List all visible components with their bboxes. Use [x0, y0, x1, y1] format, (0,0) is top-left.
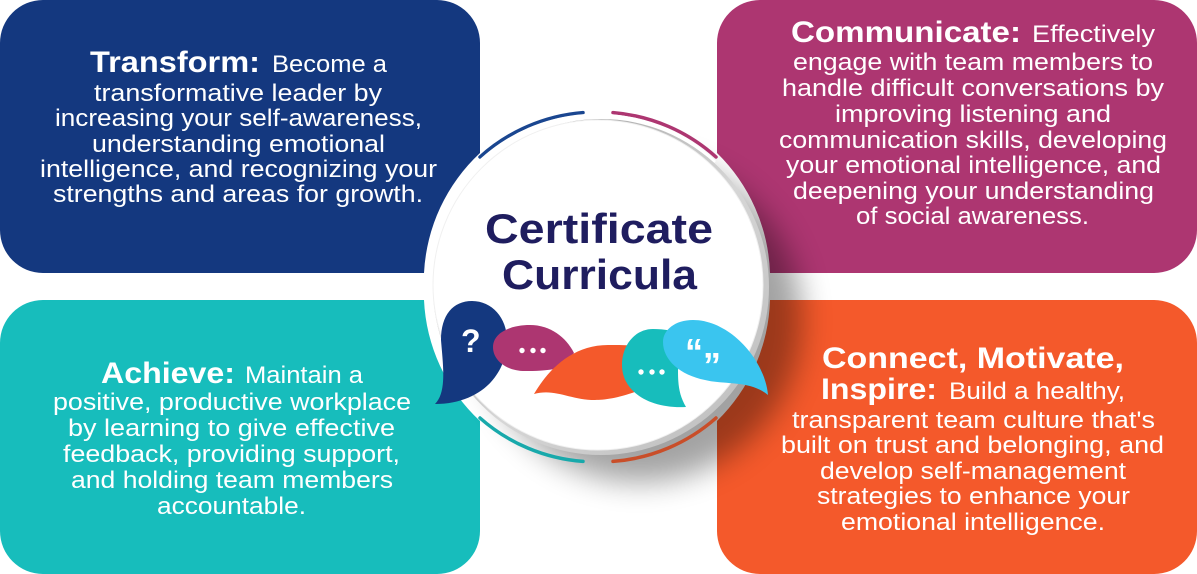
heading: Transform: Transform:	[90, 46, 260, 79]
panel background: orange	[717, 300, 1197, 574]
text block: Connect description	[781, 378, 1164, 536]
text block: Achieve description: accountable.	[157, 493, 306, 520]
bubble: teal with dots	[622, 329, 686, 407]
bubble: light blue with quotation marks: ”	[703, 345, 721, 386]
bubble: light blue with quotation marks: “	[685, 331, 703, 372]
text block: Transform description: intelligence, and recognizing your	[40, 156, 437, 183]
text block: Transform description: strengths and areas for growth.	[53, 181, 423, 208]
text block: Transform description: Become a	[272, 51, 388, 78]
panel background: teal	[0, 300, 480, 574]
central circle	[424, 114, 769, 455]
bubble: light blue with quotation marks	[663, 320, 768, 395]
arc: magenta	[613, 113, 716, 157]
text block: Achieve description: and holding team members	[71, 467, 393, 494]
white disc	[433, 120, 763, 450]
text block: Communicate description: Effectively	[1032, 21, 1155, 48]
text block: Achieve description: by learning to give effective	[68, 415, 395, 442]
arc: navy	[480, 113, 583, 157]
text block: Communicate description: your emotional intelligence, and	[786, 152, 1161, 179]
heading: Achieve: Achieve:	[101, 357, 235, 390]
bubble: orange	[534, 345, 650, 400]
text block: Communicate description: engage with team members to	[793, 49, 1153, 76]
speech bubbles	[435, 301, 768, 407]
heading: Connect, Motivate, Inspire	[821, 342, 1124, 406]
arc: orange	[613, 418, 716, 461]
bubble: magenta with dots	[493, 325, 574, 371]
text block: Communicate description	[779, 21, 1167, 230]
bubble: navy with question mark	[435, 301, 507, 404]
arc: teal	[480, 418, 583, 461]
panel background: magenta	[717, 0, 1197, 273]
heading: Communicate: Communicate:	[791, 16, 1021, 49]
text block: Achieve description: Maintain a	[245, 362, 364, 389]
panel: Transform	[0, 0, 480, 273]
drop shadow behind central circle	[478, 158, 802, 482]
text block: Communicate description: of social awareness.	[856, 203, 1089, 230]
text block: Communicate description: deepening your understanding	[793, 178, 1154, 205]
text block: Transform description	[40, 51, 437, 208]
text block: Communicate description: communication skills, developing	[779, 127, 1167, 154]
title: Certificate Curricula: Curricula	[502, 251, 698, 298]
white halo ring on upper-left	[424, 114, 716, 287]
text block: Connect description: transparent team culture that's	[792, 407, 1155, 434]
text block: Connect description: develop self-management	[820, 458, 1126, 485]
text block: Achieve description: positive, productive workplace	[53, 389, 411, 416]
title: Certificate Curricula: Certificate	[485, 205, 713, 252]
title: Certificate Curricula	[485, 205, 713, 298]
silver crescent	[433, 119, 769, 455]
text block: Transform description: understanding emotional	[92, 131, 385, 158]
text block: Connect description: emotional intelligence.	[841, 509, 1105, 536]
panel background: navy	[0, 0, 480, 273]
text block: Connect description: strategies to enhance your	[817, 483, 1130, 510]
text block: Connect description: built on trust and belonging, and	[781, 432, 1164, 459]
heading: Connect, Motivate, Inspire: Inspire:	[821, 373, 937, 406]
text block: Transform description: transformative leader by	[94, 80, 382, 107]
text block: Transform description: increasing your self-awareness,	[55, 105, 422, 132]
text block: Achieve description: feedback, providing support,	[63, 441, 400, 468]
panel: Achieve	[0, 300, 480, 574]
text block: Communicate description: improving listening and	[835, 101, 1111, 128]
bubble: navy with question mark: ?	[461, 323, 481, 359]
panel: Communicate	[717, 0, 1197, 273]
panel: Connect, Motivate, Inspire	[717, 300, 1197, 574]
text block: Achieve description	[53, 362, 411, 520]
heading: Connect, Motivate, Inspire: Connect, Motivate,	[822, 342, 1124, 375]
text block: Connect description: Build a healthy,	[949, 378, 1125, 405]
text block: Communicate description: handle difficult conversations by	[782, 75, 1164, 102]
